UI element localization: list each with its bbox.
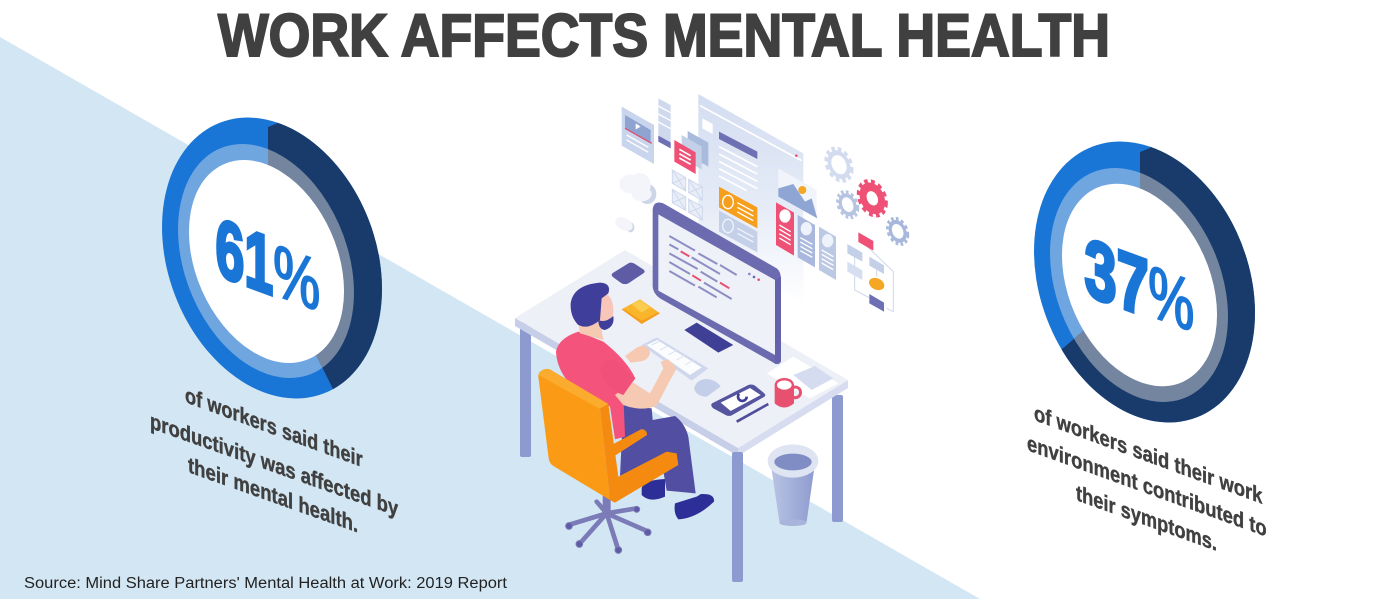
mouse (694, 379, 721, 397)
monitor stand (684, 323, 733, 353)
donut chart: 61%: 61 (216, 200, 273, 313)
background diagonal band (0, 37, 980, 599)
donut chart: 61% (162, 118, 382, 398)
caption: 61%: of workers said their (185, 383, 363, 473)
wastebasket (768, 444, 818, 526)
torso (556, 332, 635, 439)
tablet (711, 384, 765, 416)
trousers and shoes (620, 405, 714, 519)
desk (515, 250, 848, 582)
red stacked card (674, 131, 708, 174)
arms (600, 346, 677, 409)
title: WORK AFFECTS MENTAL HEALTH (218, 2, 1110, 69)
desk top (515, 250, 848, 456)
neck (578, 320, 603, 340)
chair seat (610, 452, 678, 503)
office worker (556, 283, 714, 519)
desk legs, rear (520, 322, 843, 522)
caption: 37%: their symptoms. (1076, 481, 1217, 556)
image card (778, 168, 817, 218)
monitor screen (658, 214, 775, 355)
flowchart (847, 232, 893, 312)
desk items (612, 263, 838, 422)
monitor frame (653, 202, 781, 364)
source note: Source: Mind Share Partners' Mental Health at Work: 2019 Report (24, 575, 508, 592)
profile cards (776, 202, 836, 280)
caption: 37%: environment contributed to (1027, 431, 1267, 542)
coffee mug (775, 378, 801, 407)
wireframe tiles (672, 170, 702, 220)
caption: 61%: productivity was affected by (150, 409, 398, 522)
head and hair (571, 283, 614, 330)
screen code lines (669, 236, 737, 299)
donut chart: 37%: % (1148, 247, 1195, 349)
chair base (566, 497, 651, 553)
envelope (622, 299, 660, 324)
video card (622, 107, 654, 164)
office chair (538, 369, 678, 553)
large web page panel (698, 94, 803, 303)
orange card (719, 187, 757, 252)
donut chart: 37% (1034, 142, 1255, 422)
papers (767, 357, 838, 398)
chair arm (608, 429, 647, 456)
donut chart: 61%: % (273, 226, 320, 329)
chair back (538, 371, 610, 500)
swatch column (658, 98, 671, 148)
monitor (653, 202, 781, 364)
donut chart: 37%: 37 (1084, 220, 1149, 335)
floating interface panels (613, 94, 908, 312)
keyboard (642, 337, 708, 381)
pen (737, 404, 768, 422)
router (612, 263, 645, 284)
gears (826, 145, 908, 247)
clouds (613, 173, 656, 234)
caption: 61%: their mental health. (188, 453, 358, 538)
desk front leg (732, 452, 743, 582)
caption: 37%: of workers said their work (1034, 401, 1262, 509)
